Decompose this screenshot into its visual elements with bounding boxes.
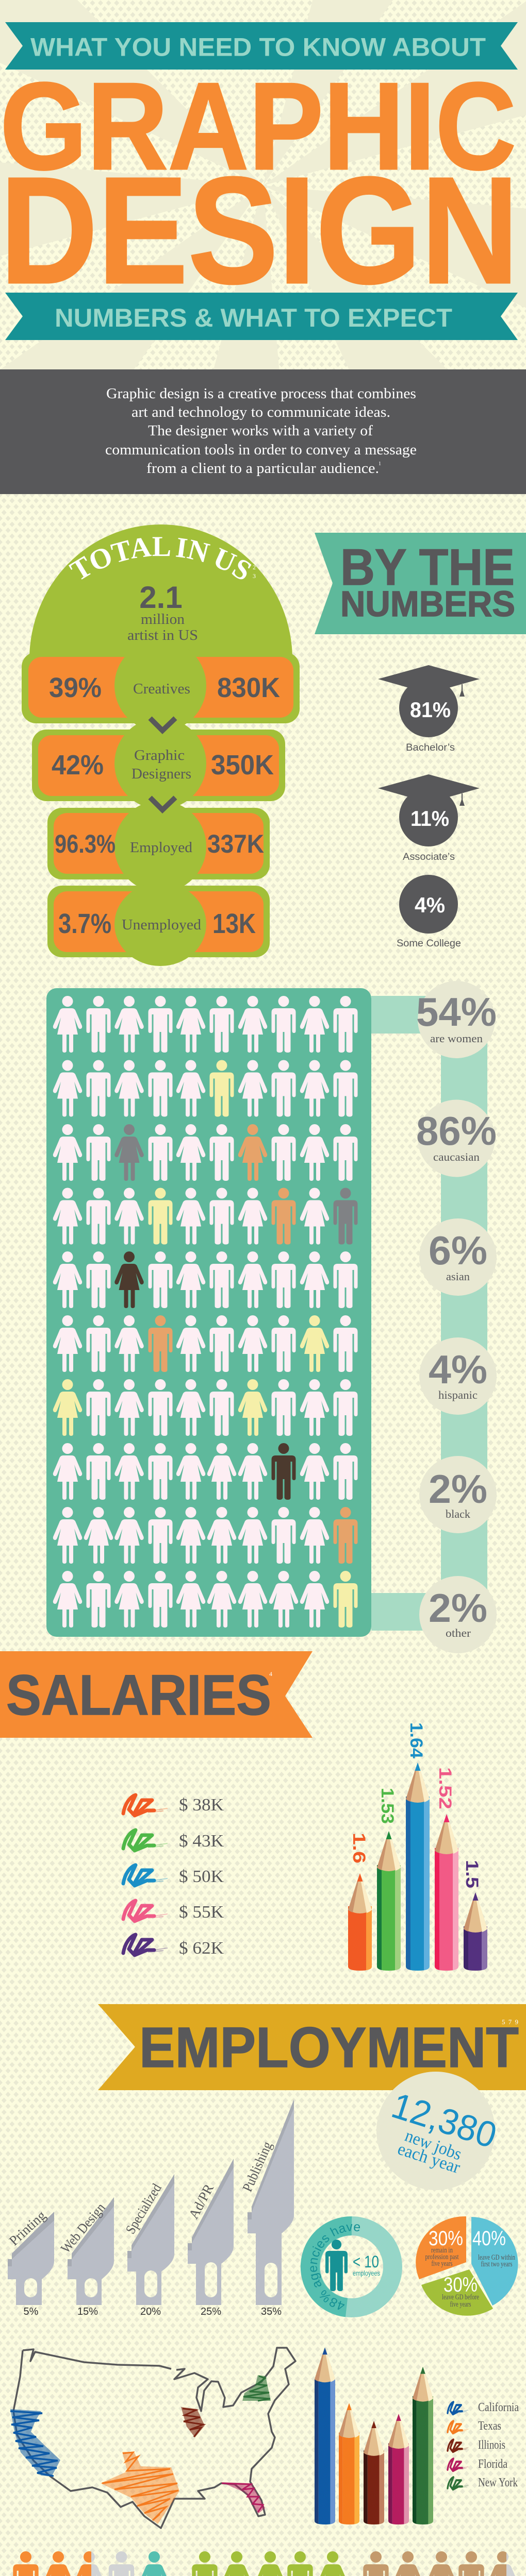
- stat: 6% asian: [419, 1218, 497, 1296]
- slice: 30% leave before five years: [421, 2269, 493, 2316]
- donut chart: agencies with fewer than 10 employees: employees: [353, 2269, 380, 2277]
- freelance pictogram: group 3: [363, 2551, 518, 2576]
- legend: Illinois: Illinois: [478, 2438, 505, 2452]
- blade: ad/pr 25%: 25%: [201, 2306, 221, 2317]
- stat: 2% other: 2%: [429, 1585, 487, 1631]
- legend: Illinois: [448, 2438, 505, 2452]
- pencil chart: top states: [315, 2347, 433, 2524]
- slice: 30% leave before five years: 30%: [443, 2274, 478, 2296]
- row 3 of people: [53, 1124, 358, 1181]
- stat: 2% other: other: [446, 1626, 471, 1639]
- pencil: Florida: [388, 2414, 409, 2524]
- stat: 4% hispanic: 4%: [429, 1347, 487, 1392]
- slice: 30% leave before five years: leave GD before: [442, 2293, 479, 2301]
- state: New York: [242, 2375, 271, 2401]
- top banner: what you need to know about: WHAT YOU NEED TO KNOW ABOUT: [30, 33, 486, 62]
- row: creatives: 39%: [49, 672, 102, 703]
- slice: 40% leave within two years: 40%: [472, 2227, 506, 2250]
- pencil value labels: 1.52: [435, 1767, 455, 1809]
- state: Illinois: [181, 2407, 205, 2437]
- blade: specialized 20%: [122, 2174, 174, 2317]
- legend: Texas: Texas: [478, 2419, 501, 2433]
- salary row 50K: $ 50K: [179, 1867, 224, 1886]
- total artists number: artist in US: [127, 628, 198, 643]
- heading: total in US: 2: [253, 564, 256, 571]
- bulb dome: [29, 524, 292, 659]
- row: graphic designers: 350K: [211, 750, 274, 781]
- pencil value labels: 1.5: [462, 1860, 482, 1888]
- salary row 55K: [123, 1901, 224, 1922]
- row 9 of people: [53, 1507, 358, 1564]
- pencil value labels: 1.64: [406, 1722, 426, 1758]
- intro text panel: [0, 369, 526, 494]
- row 1 of people: [53, 996, 358, 1053]
- blue pencil: [406, 1762, 430, 1971]
- row: unemployed: 13K: [212, 908, 256, 939]
- freelance pictogram: group 2: [192, 2551, 348, 2576]
- salary row 62K: $ 62K: [179, 1939, 224, 1958]
- slice: 30% remain in profession: profession past: [425, 2253, 459, 2261]
- row 5 of people: [53, 1251, 358, 1308]
- blade: publishing 35%: [239, 2099, 294, 2317]
- education: some college: 4%: [415, 893, 445, 917]
- pie chart: career retention: [416, 2216, 518, 2316]
- intro text panel: art and technology to communicate ideas.: [132, 404, 390, 420]
- total artists number: [127, 580, 198, 643]
- blade: printing 5%: 5%: [24, 2306, 39, 2317]
- row: unemployed: [47, 883, 270, 966]
- salary row 38K: $ 38K: [179, 1795, 224, 1815]
- lower banner: numbers and what to expect: [5, 293, 518, 340]
- row 7 of people: [53, 1379, 358, 1436]
- state: Florida: [221, 2482, 265, 2514]
- legend: Florida: Florida: [478, 2458, 507, 2471]
- row: graphic designers: Designers: [132, 766, 191, 782]
- pencil: New York: [413, 2367, 433, 2524]
- row 10 of people: [53, 1571, 358, 1628]
- stat: 86% caucasian: 86%: [416, 1108, 497, 1154]
- stat: 54% are women: are women: [430, 1032, 483, 1045]
- salary row 38K: [123, 1795, 224, 1816]
- pencil: Texas: [339, 2403, 359, 2524]
- slice: 30% remain in profession: five years: [431, 2260, 453, 2268]
- salary row 50K: [123, 1865, 224, 1886]
- intro text panel: 1: [379, 461, 381, 467]
- title: graphic design: [0, 57, 519, 315]
- intro text panel: The designer works with a variety of: [148, 423, 373, 439]
- purple pencil: [464, 1892, 487, 1971]
- map outline: [13, 2348, 295, 2528]
- donut chart: agencies with fewer than 10 employees: < 10: [353, 2252, 379, 2271]
- lower banner: numbers and what to expect: NUMBERS & WHAT TO EXPECT: [55, 303, 452, 332]
- freelance pictogram: group 1: [13, 2551, 170, 2576]
- panel: total in US bulb chart: [22, 524, 300, 966]
- stat: 2% black: 2%: [429, 1466, 487, 1512]
- education: associate's: Associate’s: [403, 852, 455, 862]
- row: employed: 337K: [207, 829, 264, 858]
- heading: total in US: TOTAL IN US: [69, 537, 252, 580]
- salary row 43K: $ 43K: [179, 1832, 224, 1851]
- total artists number: million: [141, 612, 185, 628]
- pink pencil: [435, 1814, 458, 1971]
- pencil: California: [315, 2347, 335, 2524]
- education: associate's: 11%: [410, 806, 449, 831]
- row: graphic designers: Graphic: [134, 748, 185, 764]
- slice: 30% remain in profession: remain in: [431, 2246, 453, 2255]
- stat: 6% asian: asian: [446, 1270, 470, 1283]
- banner: employment: [98, 2004, 526, 2090]
- blade: specialized 20%: 20%: [140, 2306, 161, 2317]
- stat: 54% are women: [416, 981, 497, 1058]
- banner: by the numbers: NUMBERS: [340, 584, 515, 624]
- pencil bar chart: [348, 1722, 487, 1971]
- donut chart: agencies with fewer than 10 employees: 48% agencies have: [310, 2224, 360, 2310]
- row: creatives: Creatives: [133, 681, 190, 697]
- stat: 2% other: [419, 1576, 497, 1653]
- stat: 2% black: black: [446, 1507, 470, 1520]
- orange pencil: [348, 1873, 372, 1971]
- salary row 55K: $ 55K: [179, 1903, 224, 1922]
- blade: ad/pr 25%: [186, 2159, 234, 2317]
- arrows between rows: [150, 718, 175, 810]
- banner: employment: 5 7 9: [502, 2018, 518, 2026]
- slice: 30% remain in profession: [416, 2216, 466, 2279]
- blade: printing 5%: Printing: [6, 2208, 49, 2248]
- pencil value labels: [349, 1722, 482, 1888]
- state: California: [10, 2409, 60, 2477]
- row: employed: Employed: [130, 840, 192, 856]
- blade: printing 5%: [6, 2208, 54, 2317]
- banner: salaries: 4: [269, 1670, 272, 1677]
- banner: by the numbers: BY THE: [340, 538, 515, 596]
- slice: 40% leave within two years: first two years: [481, 2260, 513, 2268]
- stat: 2% black: [419, 1456, 497, 1533]
- slice: 30% remain in profession: 30%: [429, 2227, 463, 2250]
- legend: New York: [448, 2476, 518, 2489]
- donut chart: agencies with fewer than 10 employees: [300, 2216, 402, 2317]
- connector bracket: [371, 996, 487, 1631]
- row 2 of people: [53, 1060, 358, 1117]
- stat: 86% caucasian: caucasian: [433, 1150, 480, 1163]
- banner: by the numbers: [315, 533, 526, 634]
- person icon: [325, 2240, 348, 2291]
- row: creatives: 830K: [217, 672, 280, 703]
- salary row 43K: [123, 1830, 224, 1851]
- education: bachelor's: 81%: [410, 698, 451, 722]
- stat: 54% are women: 54%: [416, 989, 497, 1035]
- blade: web design 15%: 15%: [77, 2306, 98, 2317]
- slice: 40% leave within two years: [471, 2217, 518, 2306]
- row: graphic designers: 42%: [52, 750, 104, 781]
- education: associate's: [378, 774, 480, 862]
- legend: California: [448, 2401, 519, 2414]
- intro text panel: from a client to a particular audience.: [146, 461, 379, 477]
- US map with scribbled states: [10, 2348, 295, 2528]
- row: unemployed: 3.7%: [58, 908, 111, 939]
- intro text panel: Graphic design is a creative process that combines: [106, 386, 416, 402]
- blade: specialized 20%: Specialized: [122, 2181, 165, 2236]
- banner: salaries: SALARIES: [6, 1664, 271, 1727]
- callout: 12,380 new jobs each year: new jobs: [402, 2126, 464, 2164]
- green pencil: [377, 1831, 401, 1971]
- row: graphic designers: [32, 718, 285, 809]
- education: some college: Some College: [397, 938, 461, 949]
- blade: ad/pr 25%: Ad/PR: [186, 2181, 217, 2222]
- blade: web design 15%: Web Design: [58, 2200, 108, 2256]
- pencil: Illinois: [364, 2421, 384, 2524]
- slice: 30% leave before five years: five years: [450, 2300, 471, 2309]
- stat: 86% caucasian: [416, 1099, 497, 1177]
- row 4 of people: [53, 1188, 358, 1245]
- state legend: [448, 2401, 519, 2489]
- panel: demographics pictogram: [46, 988, 371, 1637]
- intro text panel: communication tools in order to convey a message: [105, 442, 417, 458]
- education: some college: [397, 875, 461, 949]
- blade: publishing 35%: Publishing: [239, 2139, 275, 2194]
- top banner: what you need to know about: [5, 22, 518, 70]
- row: employed: [47, 801, 270, 892]
- callout: 12,380 new jobs each year: [376, 2072, 501, 2190]
- stat: 6% asian: 6%: [429, 1228, 487, 1273]
- callout: 12,380 new jobs each year: each year: [396, 2139, 463, 2177]
- callout: 12,380 new jobs each year: 12,380: [387, 2085, 501, 2156]
- row: creatives: [22, 640, 300, 732]
- blade: publishing 35%: 35%: [261, 2306, 282, 2317]
- legend: Florida: [448, 2458, 507, 2471]
- row 6 of people: [53, 1315, 358, 1372]
- salary row 62K: [123, 1935, 224, 1958]
- state: Texas: [101, 2452, 179, 2524]
- pencil value labels: 1.53: [377, 1788, 397, 1824]
- banner: salaries: [0, 1651, 313, 1738]
- heading: total in US: 3: [253, 572, 256, 580]
- stat: 4% hispanic: hispanic: [438, 1388, 478, 1401]
- row: unemployed: Unemployed: [122, 917, 201, 933]
- education: bachelor's: [378, 665, 480, 753]
- education: bachelor's: Bachelor’s: [406, 742, 455, 753]
- row 8 of people: [53, 1443, 358, 1500]
- pencil value labels: 1.6: [349, 1833, 369, 1863]
- salary legend: [123, 1795, 224, 1958]
- stat: 4% hispanic: [419, 1337, 497, 1415]
- total artists number: 2.1: [139, 580, 183, 615]
- chart: employment sectors as knife blades: [6, 2099, 294, 2317]
- legend: Texas: [448, 2419, 501, 2433]
- row: employed: 96.3%: [55, 829, 116, 858]
- blade: web design 15%: [58, 2197, 114, 2317]
